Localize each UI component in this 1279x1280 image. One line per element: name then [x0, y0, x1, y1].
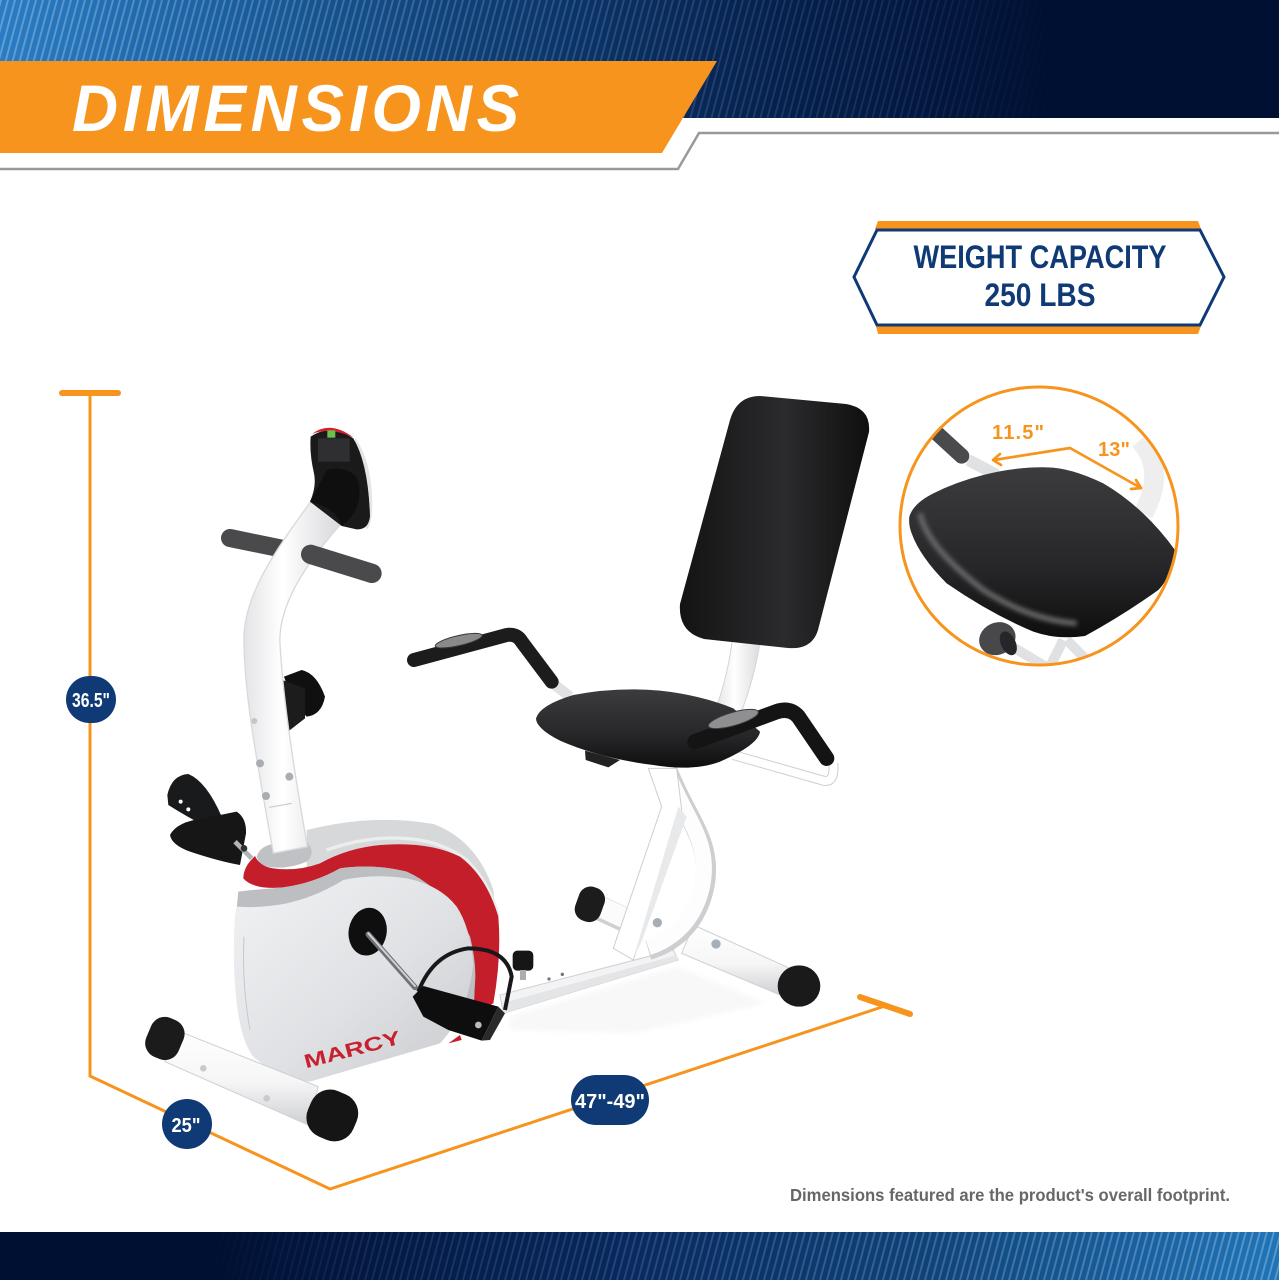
rear stabilizer tube (far)	[597, 907, 643, 928]
front stabilizer	[165, 1028, 318, 1125]
front pedal	[418, 948, 512, 1010]
title: DIMENSIONS	[72, 71, 524, 145]
red band	[243, 844, 499, 1013]
length label	[571, 1075, 649, 1125]
seat detail inset	[900, 387, 1178, 673]
bolts	[251, 718, 257, 724]
height label	[66, 676, 116, 723]
left handlebar	[230, 538, 285, 549]
length label: 47"-49"	[575, 1091, 645, 1113]
bike: rear frame and seat	[414, 630, 834, 1033]
console red top	[312, 428, 353, 437]
crank arm	[368, 934, 415, 987]
inset grip	[933, 430, 962, 456]
rear silver shell	[307, 820, 498, 937]
rail side face	[502, 955, 678, 1013]
console neck	[310, 468, 360, 526]
rear stabilizer	[682, 925, 790, 995]
right foot cap	[300, 1083, 365, 1148]
inset width label: 11.5"	[992, 422, 1044, 444]
far foot cap	[571, 883, 608, 925]
weight capacity badge: 250 LBS	[984, 277, 1096, 313]
red tail	[448, 1035, 462, 1043]
seat post strut	[613, 768, 682, 960]
rim highlight	[327, 838, 498, 917]
bike: upright and console	[230, 428, 372, 853]
bike: backrest	[680, 396, 869, 720]
inset back tube	[1140, 440, 1154, 513]
front face	[234, 876, 473, 1082]
seat cushion	[536, 689, 760, 768]
inset foot cap	[979, 622, 1016, 656]
title banner	[0, 61, 1279, 169]
console shell	[355, 437, 372, 529]
rear pedal cage	[167, 774, 222, 825]
lower handle tube	[733, 755, 834, 781]
stem collar	[257, 842, 312, 868]
console battery cover	[318, 438, 350, 462]
console back	[310, 430, 370, 529]
resistance knob dial	[284, 670, 325, 717]
brand logo: MARCY	[302, 1028, 403, 1073]
right handlebar	[311, 554, 372, 573]
inset seat highlight	[920, 513, 1077, 623]
rail holes	[547, 977, 551, 981]
rear pedal platform	[170, 812, 246, 865]
left arm handle	[414, 635, 552, 682]
seat bracket	[585, 751, 620, 767]
seat post curved tube	[648, 768, 706, 950]
width label: 25"	[172, 1115, 200, 1137]
resistance knob box	[281, 679, 305, 733]
inset handle tube	[968, 460, 997, 475]
pedal spindle	[235, 842, 252, 858]
crank hub	[345, 905, 391, 959]
dimension lines	[62, 393, 910, 1189]
inset arrows	[993, 448, 1141, 489]
inset depth label: 13"	[1098, 439, 1130, 461]
width label	[162, 1099, 212, 1149]
left foot cap	[141, 1012, 189, 1065]
footnote: Dimensions featured are the product's overall footprint.	[790, 1185, 1230, 1205]
height label: 36.5"	[72, 690, 110, 712]
weight capacity badge: WEIGHT CAPACITY	[914, 239, 1166, 275]
backrest support tube	[555, 685, 570, 697]
stem joint	[269, 803, 292, 807]
floor shadow	[510, 967, 767, 1033]
header band	[0, 0, 1279, 118]
weight capacity badge	[854, 221, 1224, 334]
console green light	[327, 430, 335, 438]
adjustment knob	[513, 951, 533, 971]
upright tube	[244, 503, 340, 853]
inset seat post tubes	[1015, 637, 1088, 664]
bike: flywheel housing	[141, 774, 533, 1148]
rail	[500, 950, 678, 1013]
footer band	[0, 1232, 1279, 1280]
silver front trim	[237, 866, 475, 1027]
inset seat	[909, 467, 1175, 637]
inset ring	[900, 387, 1178, 665]
right arm handle	[695, 710, 827, 758]
face seam	[243, 937, 250, 1030]
